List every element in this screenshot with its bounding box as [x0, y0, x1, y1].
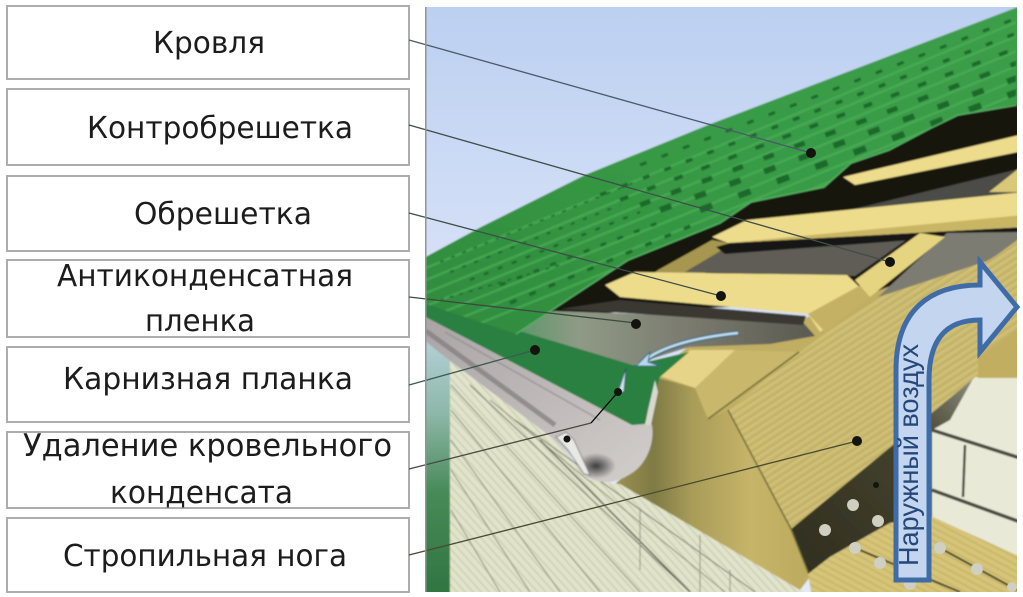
label: Антиконденсатная пленка: пленка [145, 304, 255, 339]
tile lighter ribs [426, 22, 1017, 345]
arrow: outside air [893, 262, 1017, 580]
illustration: roof cross-section [420, 0, 1023, 597]
label: Антиконденсатная пленка: Антиконденсатная [57, 259, 353, 294]
brick facade wall [449, 360, 804, 592]
decking: bottom wood [808, 517, 1023, 597]
white edge of flashing [645, 380, 658, 425]
left wall stripe [426, 342, 451, 592]
batten: top [843, 134, 1023, 185]
label: Карнизная планка [7, 347, 409, 422]
rafter: right face [728, 236, 1023, 529]
label: Антиконденсатная пленка [7, 259, 409, 339]
picture left edge [425, 7, 426, 592]
label: Удаление кровельного конденсата: конденсата [110, 475, 293, 511]
callout dots [530, 148, 895, 488]
label: Обрешетка: Обрешетка [134, 197, 312, 232]
rafter: left face [615, 378, 808, 590]
label: Контробрешетка: Контробрешетка [87, 111, 353, 146]
tiled roof [420, 5, 1023, 345]
tile bottom edge highlight [516, 105, 1017, 334]
callout lines [409, 40, 890, 555]
pale rivet dots [819, 499, 1017, 592]
rafter segment: left upper [654, 238, 730, 274]
gutter moulding [426, 331, 555, 425]
arrow label: Наружный воздух [893, 344, 924, 566]
label: Стропильная нога: Стропильная нога [63, 539, 347, 574]
dark under-roof cavity [550, 103, 1017, 314]
gutter [420, 309, 653, 482]
membrane between upper battens [852, 168, 1016, 209]
batten: middle [712, 192, 1023, 243]
label: Обрешетка [7, 176, 409, 251]
label: Кровля [7, 6, 409, 79]
label: Удаление кровельного конденсата [7, 428, 409, 511]
gutter end shading [576, 453, 616, 479]
label: Удаление кровельного конденсата: Удаление кровельного [23, 428, 392, 464]
label: Контробрешетка [7, 89, 409, 165]
batten: small brace [988, 168, 1017, 194]
membrane: below middle batten [685, 236, 912, 276]
shadow under rafter [791, 377, 974, 574]
label: Кровля: Кровля [153, 26, 265, 61]
sky background [420, 0, 1023, 597]
grey membrane right [878, 232, 1023, 297]
batten: lower [605, 272, 870, 332]
panel: labels [7, 6, 409, 592]
gray film: anti-condensation [500, 311, 815, 365]
rafter: cut top [660, 350, 735, 388]
tile dark steps [440, 18, 1017, 303]
label: Карнизная планка: Карнизная планка [63, 362, 353, 397]
brick wall: right side [932, 376, 1017, 556]
gutter bracket [556, 432, 590, 475]
arrow: condensate flow [618, 333, 738, 392]
eaves flashing [420, 301, 689, 425]
label: Стропильная нога [7, 518, 409, 592]
wood backing [658, 256, 996, 590]
